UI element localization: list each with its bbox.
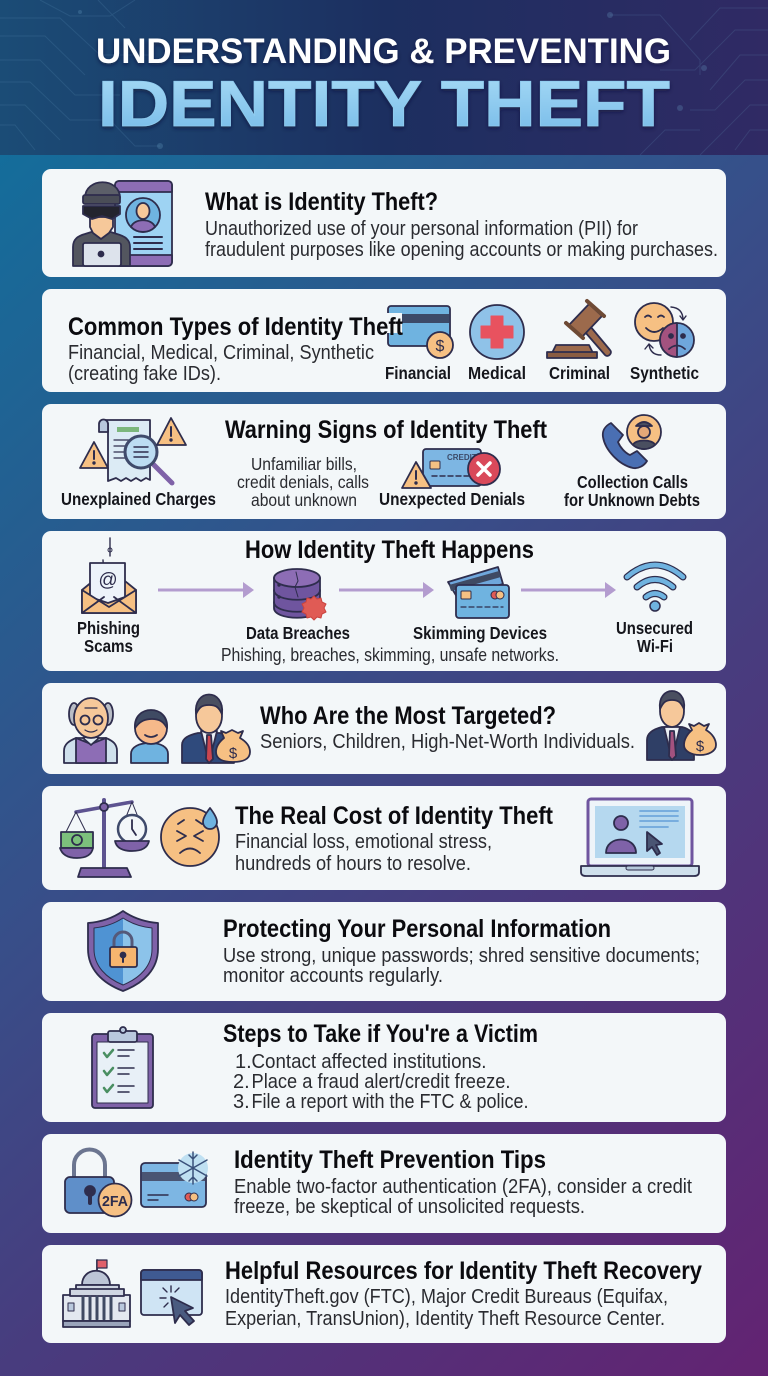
- warning labels: [61, 472, 700, 510]
- type labels: [385, 363, 699, 383]
- description: IdentityTheft.gov (FTC), Major Credit Bureaus (Equifax,: [225, 1286, 668, 1308]
- heading: Identity Theft Prevention Tips: [234, 1146, 546, 1174]
- icon: senior: [64, 698, 117, 763]
- icon: wealthy individual repeat: $: [696, 738, 705, 755]
- panel: how it happens: [42, 531, 726, 671]
- arrow: skimming to wifi: [521, 582, 616, 598]
- heading: Who Are the Most Targeted?: [260, 702, 556, 730]
- panel: what is identity theft: [42, 169, 726, 277]
- description: (creating fake IDs).: [68, 363, 221, 385]
- description: Phishing, breaches, skimming, unsafe networks.: [221, 645, 559, 665]
- icon: scale with cash and clock: [60, 800, 149, 877]
- icon: financial card: [386, 306, 453, 358]
- arrow: breaches to skimming: [339, 582, 434, 598]
- icon: phone with collector bubble: [603, 415, 661, 468]
- warning labels: for Unknown Debts: [564, 490, 700, 510]
- heading: How Identity Theft Happens: [245, 536, 534, 564]
- title: [96, 32, 671, 140]
- warning labels: Unexplained Charges: [61, 489, 216, 509]
- step labels: Skimming Devices: [413, 623, 547, 643]
- description: Unfamiliar bills,: [251, 454, 357, 474]
- heading: The Real Cost of Identity Theft: [235, 802, 554, 830]
- heading: Helpful Resources for Identity Theft Recovery: [225, 1257, 702, 1285]
- icon: government building: [63, 1260, 130, 1327]
- icon: stressed face: [161, 808, 219, 866]
- panel: warning signs: [42, 404, 726, 519]
- icon: checklist clipboard: [92, 1027, 153, 1108]
- type labels: Criminal: [549, 363, 610, 383]
- description: [223, 945, 700, 987]
- description: [205, 218, 718, 261]
- description: Use strong, unique passwords; shred sensitive documents;: [223, 945, 700, 967]
- type labels: Financial: [385, 363, 451, 383]
- title: UNDERSTANDING & PREVENTING: [96, 32, 671, 71]
- step labels: Wi-Fi: [637, 636, 673, 656]
- icon: frozen credit card: [141, 1152, 208, 1207]
- numbered steps: 2.: [233, 1071, 250, 1093]
- icon: shield with lock: [88, 911, 158, 991]
- icon: financial card: $: [436, 338, 445, 355]
- title: IDENTITY THEFT: [98, 67, 670, 140]
- description: [237, 454, 369, 510]
- warning labels: Collection Calls: [577, 472, 688, 492]
- icon: wealthy individual: [182, 694, 250, 763]
- description: Enable two-factor authentication (2FA), consider a credit: [234, 1176, 692, 1198]
- step labels: Scams: [84, 636, 133, 656]
- icon: denied credit card: [402, 449, 500, 488]
- description: fraudulent purposes like opening accounts or making purchases.: [205, 239, 718, 261]
- description: [235, 831, 492, 875]
- description: [225, 1286, 668, 1330]
- icon: hacker with profile phone: [73, 181, 172, 266]
- step labels: [77, 618, 693, 656]
- description: Financial loss, emotional stress,: [235, 831, 492, 853]
- icon: data breach database: [274, 569, 326, 620]
- step labels: Unsecured: [616, 618, 693, 638]
- arrow: phishing to breaches: [158, 582, 254, 598]
- heading: Steps to Take if You're a Victim: [223, 1020, 538, 1048]
- icon: skimming cards: [448, 567, 509, 618]
- step labels: Phishing: [77, 618, 140, 638]
- description: credit denials, calls: [237, 472, 369, 492]
- icon: denied credit card: CREDIT: [447, 453, 477, 462]
- icon: wealthy individual: $: [229, 745, 238, 762]
- icon: synthetic faces: [635, 303, 694, 357]
- panel: victim steps: [42, 1013, 726, 1122]
- icon: child: [131, 710, 168, 763]
- description: Experian, TransUnion), Identity Theft Resource Center.: [225, 1308, 665, 1330]
- description: [234, 1176, 692, 1218]
- icon: padlock with 2FA: [65, 1149, 132, 1216]
- heading: Common Types of Identity Theft: [68, 313, 404, 341]
- panel: helpful resources: [42, 1245, 726, 1343]
- numbered steps: 1.: [235, 1051, 252, 1073]
- icon: phishing email: @: [98, 570, 118, 591]
- icon: wealthy individual repeat: [647, 691, 716, 760]
- numbered steps: [233, 1051, 528, 1113]
- description: Unauthorized use of your personal information (PII) for: [205, 218, 638, 240]
- numbered steps: 3.: [233, 1091, 250, 1113]
- heading: Warning Signs of Identity Theft: [225, 416, 548, 444]
- description: monitor accounts regularly.: [223, 965, 443, 987]
- heading: What is Identity Theft?: [205, 188, 438, 216]
- description: hundreds of hours to resolve.: [235, 853, 471, 875]
- description: freeze, be skeptical of unsolicited requests.: [234, 1196, 585, 1218]
- panel: prevention tips: [42, 1134, 726, 1233]
- description: Seniors, Children, High-Net-Worth Individuals.: [260, 731, 635, 753]
- icon: receipt with magnifier: [80, 418, 186, 483]
- numbered steps: Contact affected institutions.: [252, 1051, 486, 1073]
- warning labels: Unexpected Denials: [379, 489, 525, 509]
- type labels: Synthetic: [630, 363, 699, 383]
- numbered steps: Place a fraud alert/credit freeze.: [252, 1071, 510, 1093]
- panel: real cost: [42, 786, 726, 890]
- panel: common types: [42, 289, 726, 392]
- step labels: Data Breaches: [246, 623, 350, 643]
- description: [68, 342, 374, 385]
- icon: wifi: [627, 565, 683, 611]
- icon: browser window with cursor: [141, 1270, 202, 1325]
- icon: padlock with 2FA: 2FA: [102, 1193, 128, 1210]
- header banner: [0, 0, 768, 155]
- icon: laptop: [581, 799, 699, 876]
- panel: protecting information: [42, 902, 726, 1001]
- description: Financial, Medical, Criminal, Synthetic: [68, 342, 374, 364]
- icon: phishing email: [82, 538, 136, 613]
- icon: gavel: [547, 301, 611, 358]
- heading: Protecting Your Personal Information: [223, 915, 611, 943]
- icon: medical cross: [470, 305, 524, 359]
- panel: most targeted: [42, 683, 726, 774]
- type labels: Medical: [468, 363, 526, 383]
- numbered steps: File a report with the FTC & police.: [252, 1091, 528, 1113]
- description: about unknown: [251, 490, 357, 510]
